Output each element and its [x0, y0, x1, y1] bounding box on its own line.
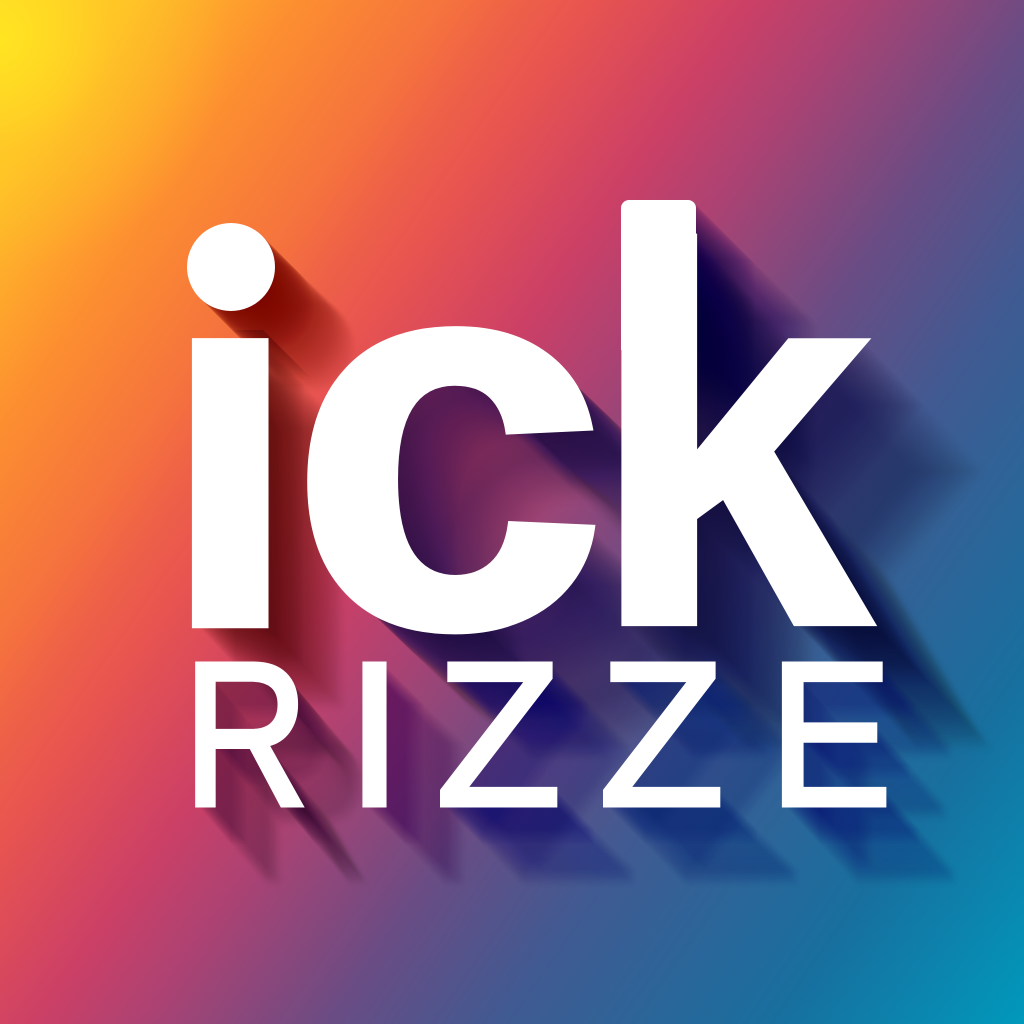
letter Z: Z: [436, 620, 561, 849]
letter c: c: [289, 130, 607, 742]
letter R: R: [183, 620, 309, 849]
letter I: I: [346, 620, 403, 849]
letter i round dot: [187, 223, 275, 311]
letter k upper stem: [621, 200, 696, 350]
logo wordmark: RIZZE: [183, 620, 952, 882]
logo wordmark: ick: [187, 130, 986, 746]
letter i stem: i: [161, 141, 300, 737]
letter k: k: [589, 140, 871, 736]
letter E: E: [769, 620, 892, 849]
letter Z: Z: [599, 620, 724, 849]
